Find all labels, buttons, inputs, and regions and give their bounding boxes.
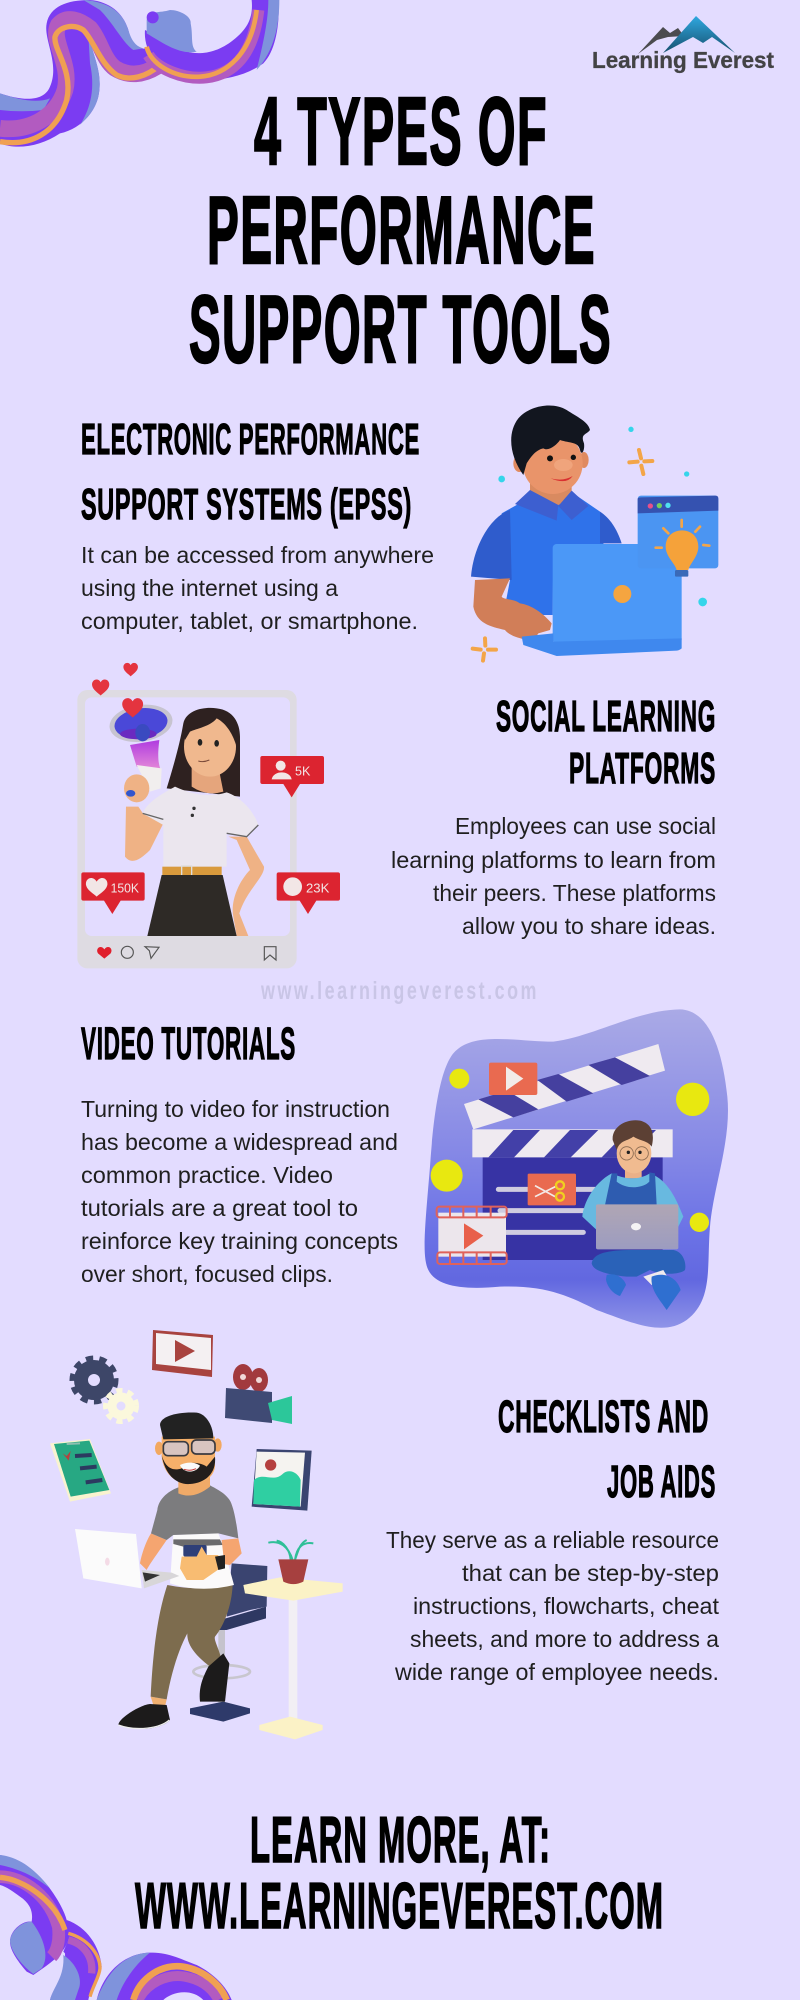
heading: EPSS (81, 415, 420, 529)
social post frame (77, 690, 297, 968)
text: EPSS description: computer, tablet, or smartphone. (81, 608, 418, 634)
illustration: woman with megaphone (77, 663, 340, 968)
badge: 150K: 150K (111, 881, 140, 895)
logo wordmark: Learning Everest (592, 47, 774, 73)
icon: gears (73, 1359, 136, 1421)
text: video tutorials description: over short, focused clips. (81, 1261, 333, 1287)
badge: 23K: 23K (306, 881, 330, 895)
side table with plant (243, 1540, 343, 1739)
icon: checklist (50, 1439, 111, 1502)
title (189, 78, 612, 383)
text: EPSS description: It can be accessed from anywhere (81, 542, 434, 568)
icon: play tile (152, 1330, 213, 1377)
film strip (437, 1207, 507, 1264)
megaphone (107, 701, 175, 802)
text: social learning description: allow you to share ideas. (462, 913, 716, 939)
text: checklists description: that can be step-by-step (462, 1560, 719, 1586)
text: checklists description: They serve as a reliable resource (386, 1527, 719, 1553)
icon: video camera (225, 1364, 292, 1424)
text: EPSS description (81, 542, 434, 634)
text: checklists description: sheets, and more to address a (410, 1626, 719, 1652)
seated person (582, 1120, 685, 1310)
text: social learning description: Employees can use social (455, 813, 716, 839)
text: video tutorials description: tutorials are a great tool to (81, 1195, 358, 1221)
text: video tutorials description: reinforce key training concepts (81, 1228, 398, 1254)
logo: Learning Everest (592, 16, 774, 73)
text: video tutorials description: Turning to video for instruction (81, 1096, 390, 1122)
icon: mountains (638, 16, 735, 54)
heading: video tutorials: VIDEO TUTORIALS (81, 1018, 296, 1069)
panel: checklists and job aids (50, 1330, 720, 1739)
laptop (75, 1529, 179, 1588)
decorative swirl: top left (0, 0, 279, 147)
text: social learning description: learning platforms to learn from (391, 847, 716, 873)
watermark: www.learningeverest.com (260, 977, 539, 1005)
panel: EPSS (81, 405, 718, 661)
panel: social learning platforms (77, 663, 716, 968)
illustration: clapperboard with person (425, 1009, 728, 1328)
text: video tutorials description: common practice. Video (81, 1162, 333, 1188)
text: EPSS description: using the internet using a (81, 575, 338, 601)
badge: 23K (277, 872, 340, 914)
icon: picture frame (252, 1449, 312, 1511)
call to action (135, 1803, 664, 1942)
hearts (92, 663, 143, 717)
text: video tutorials description: has become a widespread and (81, 1129, 398, 1155)
illustration: man with laptop (471, 405, 718, 661)
text: checklists description: instructions, flowcharts, cheat (413, 1593, 720, 1619)
stool (190, 1563, 267, 1722)
text: social learning description (391, 813, 716, 939)
heading: EPSS: ELECTRONIC PERFORMANCE (81, 415, 420, 464)
heading: checklists and job aids (498, 1391, 716, 1507)
text: checklists description: wide range of employee needs. (394, 1659, 719, 1685)
text: video tutorials description (81, 1096, 398, 1287)
figure: man (75, 1413, 242, 1729)
decorative swirl: bottom left (0, 1855, 232, 2000)
text: social learning description: their peers. These platforms (433, 880, 716, 906)
badge: 5K (260, 756, 324, 797)
heading: EPSS: SUPPORT SYSTEMS (EPSS) (81, 480, 412, 529)
badge: 5K: 5K (295, 765, 311, 779)
badge: 150K (81, 872, 145, 914)
heading: social learning platforms (496, 692, 716, 793)
text: checklists description (386, 1527, 720, 1685)
illustration: man with floating icons (50, 1330, 343, 1739)
panel: video tutorials (81, 1009, 728, 1328)
